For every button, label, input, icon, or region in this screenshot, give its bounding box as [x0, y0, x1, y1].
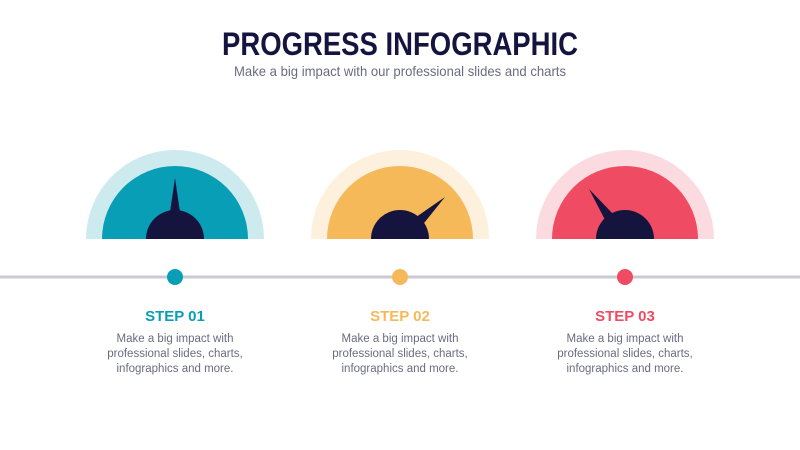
step 3 text: STEP 03 — [595, 308, 655, 325]
gauge 3 — [536, 150, 714, 239]
step 1 text: Make a big impact with — [117, 333, 233, 345]
dot 3 — [617, 269, 633, 285]
gauge 2 — [311, 150, 489, 239]
gauge 1 — [86, 150, 264, 239]
step 1 text: professional slides, charts, — [107, 348, 243, 360]
subtitle: Make a big impact with our professional slides and charts — [234, 63, 566, 79]
step 1 text — [107, 308, 243, 375]
step 2 text — [332, 308, 468, 375]
step 1 text: infographics and more. — [117, 363, 233, 375]
dot 2 — [392, 269, 408, 285]
step 3 text: infographics and more. — [567, 363, 683, 375]
step 2 text: infographics and more. — [342, 363, 458, 375]
step 2 text: professional slides, charts, — [332, 348, 468, 360]
step 3 text — [557, 308, 693, 375]
step 1 text: STEP 01 — [145, 308, 205, 325]
step 2 text: STEP 02 — [370, 308, 430, 325]
step 3 text: Make a big impact with — [567, 333, 683, 345]
timeline line — [0, 276, 800, 278]
step 3 text: professional slides, charts, — [557, 348, 693, 360]
step 2 text: Make a big impact with — [342, 333, 458, 345]
title: PROGRESS INFOGRAPHIC — [222, 26, 578, 62]
dot 1 — [167, 269, 183, 285]
